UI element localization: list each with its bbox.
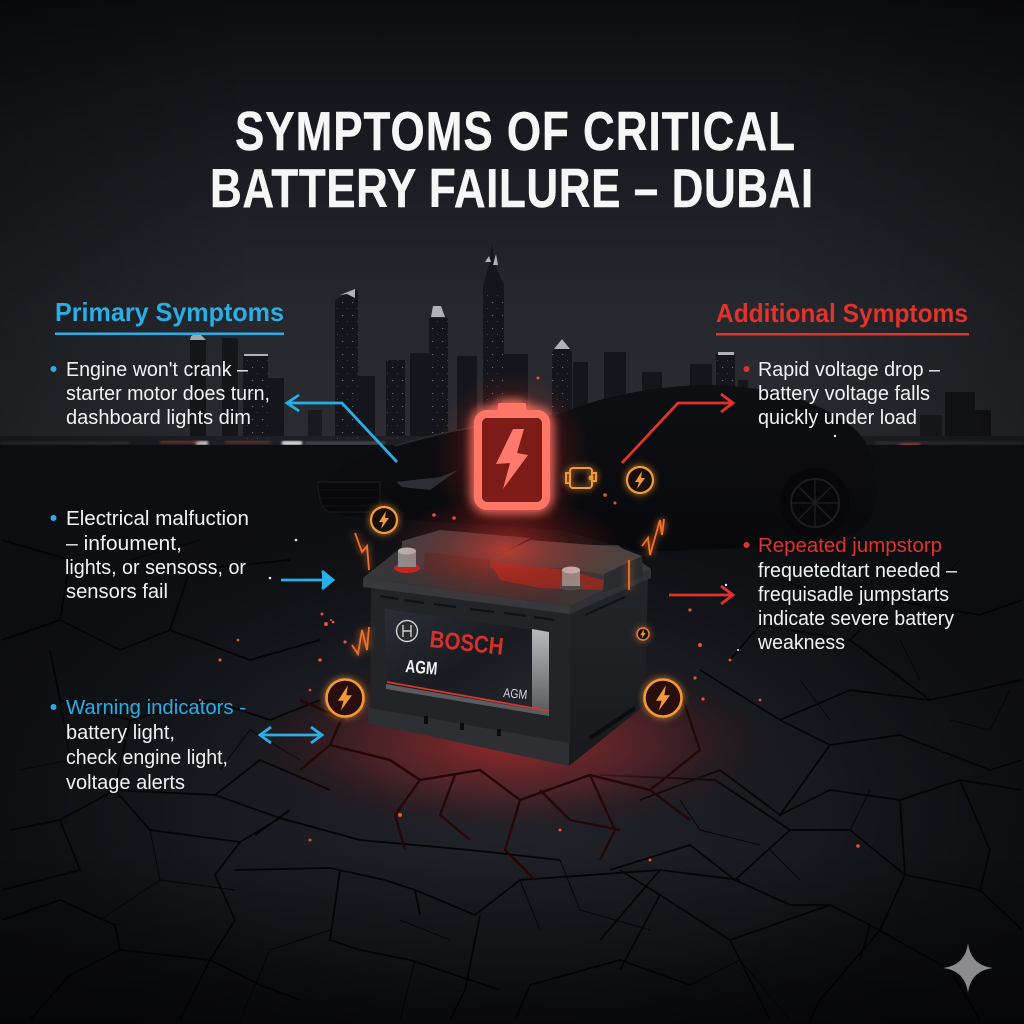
battery: grey base band: [386, 684, 549, 716]
symptom: repeated jumpstarts: weakness: [757, 632, 845, 654]
symptom: engine won't crank: dashboard lights dim: [66, 407, 251, 429]
electric arcs: [352, 519, 664, 654]
symptom: rapid voltage drop: quickly under load: [758, 407, 917, 429]
brand name: BOSCH: [428, 626, 505, 661]
arrow: red to voltage symptom: [622, 394, 733, 463]
battery: right face: [569, 572, 648, 766]
symptom: rapid voltage drop: [744, 359, 941, 429]
icon: check engine: [566, 468, 596, 488]
icon: small bolt circle: [637, 628, 649, 640]
battery top glow: [390, 495, 620, 605]
fine hairline cracks: [20, 540, 1010, 1020]
car battery: [363, 530, 651, 766]
ground bottom vignette: [0, 445, 1024, 1024]
symptom: warning indicators: check engine light,: [66, 747, 228, 769]
symptom: electrical malfunction: – infoument,: [66, 533, 182, 555]
symptom: repeated jumpstarts: indicate severe battery: [758, 608, 954, 630]
battery: left terminal: [394, 548, 420, 573]
symptom: engine won't crank: Engine won't crank –: [66, 359, 249, 381]
battery: silver strip: [532, 629, 549, 716]
panel: primary symptoms: [50, 297, 284, 794]
symptom: warning indicators: voltage alerts: [66, 772, 185, 794]
ground cracks: [2, 540, 1022, 1020]
symptom: repeated jumpstarts: frequisadle jumpstarts: [758, 584, 949, 606]
halo behind battery icon: [434, 370, 590, 546]
title: SYMPTOMS OF CRITICAL: [235, 100, 795, 162]
battery: raised lid right: [490, 540, 642, 575]
symptom: warning indicators: [50, 697, 246, 794]
heading underline: [55, 332, 284, 335]
arrow: blue to engine symptom: [287, 395, 397, 462]
car silhouette: [316, 385, 877, 552]
battery: right terminal: [559, 566, 583, 590]
symptom: electrical malfunction: [50, 508, 249, 603]
battery: raised lid left: [402, 530, 530, 570]
battery: front face: [370, 585, 570, 743]
icon: bolt circle upper right: [627, 467, 653, 493]
battery: top plate: [363, 545, 651, 606]
battery: label panel: [385, 609, 549, 716]
battery: vents: [380, 596, 625, 620]
symptom: repeated jumpstarts: frequetedtart needed –: [758, 560, 958, 582]
title: [210, 100, 813, 219]
background: cracked ground sheen: [0, 445, 1024, 1024]
icon: bolt circle lower left: [326, 680, 364, 716]
icon: corner sparkle watermark: [943, 943, 993, 993]
red glow on ground: [247, 650, 777, 834]
icon: bolt circle lower right: [644, 680, 682, 716]
glowing red cracks: [300, 690, 700, 880]
AGM label large: AGM: [405, 656, 438, 679]
heading underline: [716, 333, 969, 336]
arrow: blue to electrical symptom: [281, 571, 333, 589]
symptom: warning indicators: battery light,: [66, 722, 175, 744]
symptom: warning indicators: Warning indicators -: [66, 697, 246, 719]
rising sparks: [199, 376, 860, 862]
battery: base skirt: [368, 707, 570, 766]
background: night sky: [0, 0, 1024, 446]
background: ground base: [0, 445, 1024, 1024]
arrow: blue double-headed to warning symptom: [260, 727, 322, 743]
symptom: repeated jumpstarts: Repeated jumpstorp: [758, 535, 942, 557]
symptom: rapid voltage drop: battery voltage falls: [758, 383, 930, 405]
title: BATTERY FAILURE – DUBAI: [210, 157, 813, 219]
heading: primary symptoms: Primary Symptoms: [55, 297, 284, 327]
battery: base notches: [426, 708, 635, 738]
icon: glowing battery with bolt: [478, 403, 546, 506]
icon: bolt circle upper left: [371, 507, 397, 533]
brand logo: [396, 620, 418, 642]
Dubai skyline: [0, 243, 1024, 446]
symptom: repeated jumpstarts: [744, 535, 958, 654]
arrow: red to jumpstart symptom: [669, 586, 733, 604]
symptom: engine won't crank: [50, 359, 270, 429]
symptom: electrical malfunction: Electrical malfuction: [66, 508, 249, 530]
symptom: rapid voltage drop: Rapid voltage drop –: [758, 359, 941, 381]
AGM label small: AGM: [503, 685, 528, 702]
symptom: electrical malfunction: sensors fail: [66, 581, 168, 603]
symptom: engine won't crank: starter motor does turn,: [66, 383, 270, 405]
heading: additional symptoms: Additional Symptoms: [716, 298, 968, 328]
symptom: electrical malfunction: lights, or sensoss, or: [65, 557, 246, 579]
battery: red stripe: [387, 682, 549, 711]
side vignette on sky: [0, 0, 1024, 446]
panel: additional symptoms: [716, 298, 969, 654]
